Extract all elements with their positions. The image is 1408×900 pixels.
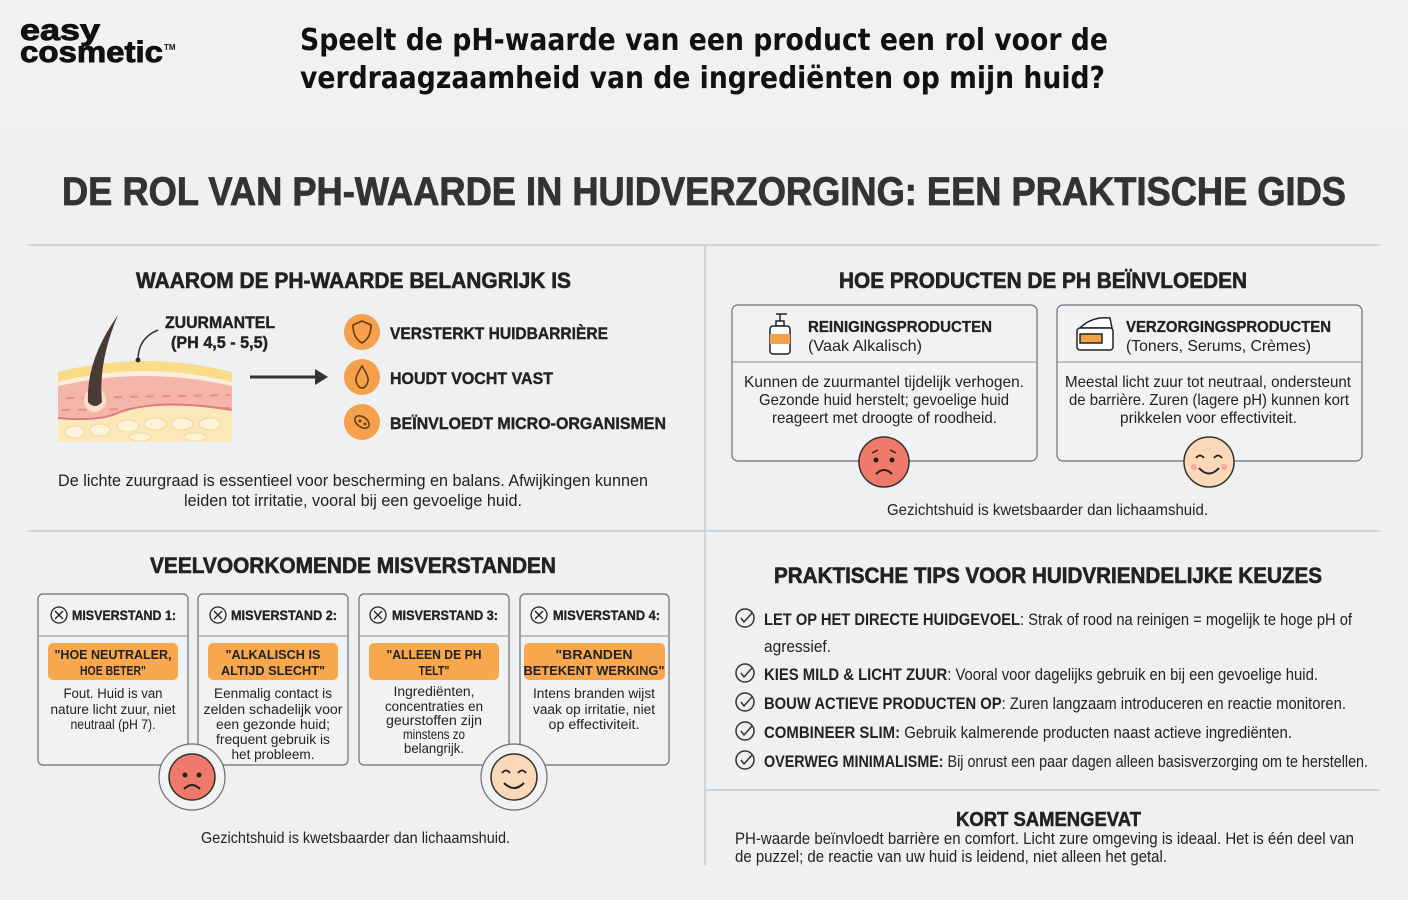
tip list: COMBINEER SLIM: Gebruik kalmerende producten naast actieve ingrediënten.: [764, 723, 1292, 742]
heading: misverstanden: VEELVOORKOMENDE MISVERSTANDEN: [150, 553, 556, 578]
tip list: [736, 609, 1368, 771]
panel: kort samengevat: [735, 809, 1354, 866]
card: verzorgingsproducten: [1057, 305, 1362, 461]
arrow: [250, 369, 328, 385]
logo: easy: [20, 14, 100, 47]
card: misverstand 3: [359, 594, 509, 765]
card: misverstand 3: Ingrediënten,: [394, 684, 474, 699]
card: reinigingsproducten: [732, 305, 1037, 461]
card: misverstand 2: frequent gebruik is: [216, 732, 330, 747]
caption: Gezichtshuid is kwetsbaarder dan lichaamshuid.: [201, 830, 510, 847]
card: misverstand 1: MISVERSTAND 1:: [72, 607, 176, 623]
card: misverstand 1: HOE BETER": [80, 663, 146, 678]
icon: sad face: [159, 744, 225, 810]
card: misverstand 1: [38, 594, 188, 765]
card: verzorgingsproducten: (Toners, Serums, Crèmes): [1126, 338, 1311, 355]
card: misverstand 3: TELT": [418, 663, 450, 678]
card: misverstand 3: "ALLEEN DE PH: [386, 647, 482, 662]
card: verzorgingsproducten: VERZORGINGSPRODUCTEN: [1126, 319, 1331, 336]
heading: waarom: WAAROM DE PH-WAARDE BELANGRIJK IS: [136, 268, 571, 293]
icon: happy face: [1184, 437, 1234, 487]
logo: cosmetic: [20, 36, 163, 69]
card: misverstand 3: MISVERSTAND 3:: [392, 607, 498, 623]
label: zuurmantel: (PH 4,5 - 5,5): [171, 333, 268, 352]
benefit texts: HOUDT VOCHT VAST: [390, 369, 554, 388]
panel: kort samengevat: de puzzel; de reactie van uw huid is leidend, niet alleen het getal.: [735, 848, 1167, 866]
card: reinigingsproducten: Gezonde huid herstelt; gevoelige huid: [759, 392, 1009, 409]
card: misverstand 1: "HOE NEUTRALER,: [54, 647, 172, 662]
card: reinigingsproducten: Kunnen de zuurmantel tijdelijk verhogen.: [744, 374, 1024, 391]
tip list: BOUW ACTIEVE PRODUCTEN OP: Zuren langzaam introduceren en reactie monitoren.: [764, 694, 1346, 713]
heading: producten: HOE PRODUCTEN DE PH BEÏNVLOEDEN: [839, 268, 1247, 293]
icon: drop: [344, 359, 380, 395]
card: misverstand 2: het probleem.: [232, 747, 314, 762]
paragraph: [58, 471, 648, 510]
tip list: agressief.: [764, 637, 831, 656]
benefit texts: VERSTERKT HUIDBARRIÈRE: [390, 324, 608, 343]
card: misverstand 4: vaak op irritatie, niet: [533, 702, 655, 717]
panel: waarom belangrijk: [58, 268, 666, 510]
icon: sad face: [859, 437, 909, 487]
icon: shield: [344, 314, 380, 350]
card: reinigingsproducten: (Vaak Alkalisch): [808, 338, 922, 355]
card: misverstand 1: nature licht zuur, niet: [50, 702, 176, 717]
label: zuurmantel: ZUURMANTEL: [165, 313, 275, 332]
header question: Speelt de pH-waarde van een product een rol voor de: [300, 23, 1108, 58]
panel: kort samengevat: PH-waarde beïnvloedt barrière en comfort. Licht zure omgeving is ideaal. Het is één deel van: [735, 830, 1354, 848]
header question: verdraagzaamheid van de ingrediënten op mijn huid?: [300, 61, 1105, 96]
panel: kort samengevat: KORT SAMENGEVAT: [956, 809, 1141, 831]
card: misverstand 3: geurstoffen zijn: [386, 713, 482, 728]
card: misverstand 4: BETEKENT WERKING": [524, 663, 664, 678]
logo: [20, 14, 176, 69]
panel: misverstanden: [38, 553, 669, 847]
illustration: skin layers: [58, 315, 232, 442]
card: misverstand 4: "BRANDEN: [556, 647, 632, 662]
card: misverstand 3: minstens zo: [403, 727, 465, 742]
card: misverstand 4: [520, 594, 669, 765]
heading: tips: PRAKTISCHE TIPS VOOR HUIDVRIENDELIJKE KEUZES: [774, 563, 1322, 588]
card: misverstand 3: belangrijk.: [404, 741, 464, 756]
panel: producten: [732, 268, 1362, 519]
card: misverstand 4: Intens branden wijst: [533, 686, 655, 701]
tip list: KIES MILD & LICHT ZUUR: Vooral voor dagelijks gebruik en bij een gevoelige huid.: [764, 665, 1318, 684]
card: misverstand 1: Fout. Huid is van: [64, 686, 162, 701]
card: misverstand 2: [198, 594, 348, 765]
paragraph: De lichte zuurgraad is essentieel voor bescherming en balans. Afwijkingen kunnen: [58, 471, 648, 490]
logo: TM: [164, 43, 176, 52]
icon: microbe: [344, 404, 380, 440]
card: misverstand 2: zelden schadelijk voor: [204, 702, 343, 717]
caption: Gezichtshuid is kwetsbaarder dan lichaamshuid.: [887, 502, 1208, 519]
card: reinigingsproducten: REINIGINGSPRODUCTEN: [808, 319, 992, 336]
card: misverstand 4: MISVERSTAND 4:: [553, 607, 660, 623]
card: reinigingsproducten: reageert met droogte of roodheid.: [772, 410, 997, 427]
card: misverstand 1: neutraal (pH 7).: [70, 717, 156, 732]
card: misverstand 2: een gezonde huid;: [216, 717, 330, 732]
header question: [300, 23, 1108, 96]
card: misverstand 4: op effectiviteit.: [548, 717, 640, 732]
card: verzorgingsproducten: prikkelen voor effectiviteit.: [1120, 410, 1297, 427]
card: misverstand 2: ALTIJD SLECHT": [221, 663, 325, 678]
card: misverstand 2: Eenmalig contact is: [214, 686, 332, 701]
label: zuurmantel: [165, 313, 275, 352]
icon: happy face: [481, 744, 547, 810]
benefit texts: [390, 324, 666, 433]
paragraph: leiden tot irritatie, vooral bij een gevoelige huid.: [184, 491, 522, 510]
panel: praktische tips: [736, 563, 1368, 771]
icon: jar: [1077, 318, 1113, 350]
card: misverstand 2: "ALKALISCH IS: [226, 647, 321, 662]
card: verzorgingsproducten: de barrière. Zuren (lagere pH) kunnen kort: [1069, 392, 1350, 409]
icon: bottle: [770, 314, 790, 354]
card: misverstand 3: concentraties en: [385, 699, 483, 714]
tip list: LET OP HET DIRECTE HUIDGEVOEL: Strak of rood na reinigen = mogelijk te hoge pH of: [764, 610, 1352, 629]
card: misverstand 2: MISVERSTAND 2:: [231, 607, 337, 623]
benefit texts: BEÏNVLOEDT MICRO-ORGANISMEN: [390, 414, 666, 433]
card: verzorgingsproducten: Meestal licht zuur tot neutraal, ondersteunt: [1065, 374, 1352, 391]
